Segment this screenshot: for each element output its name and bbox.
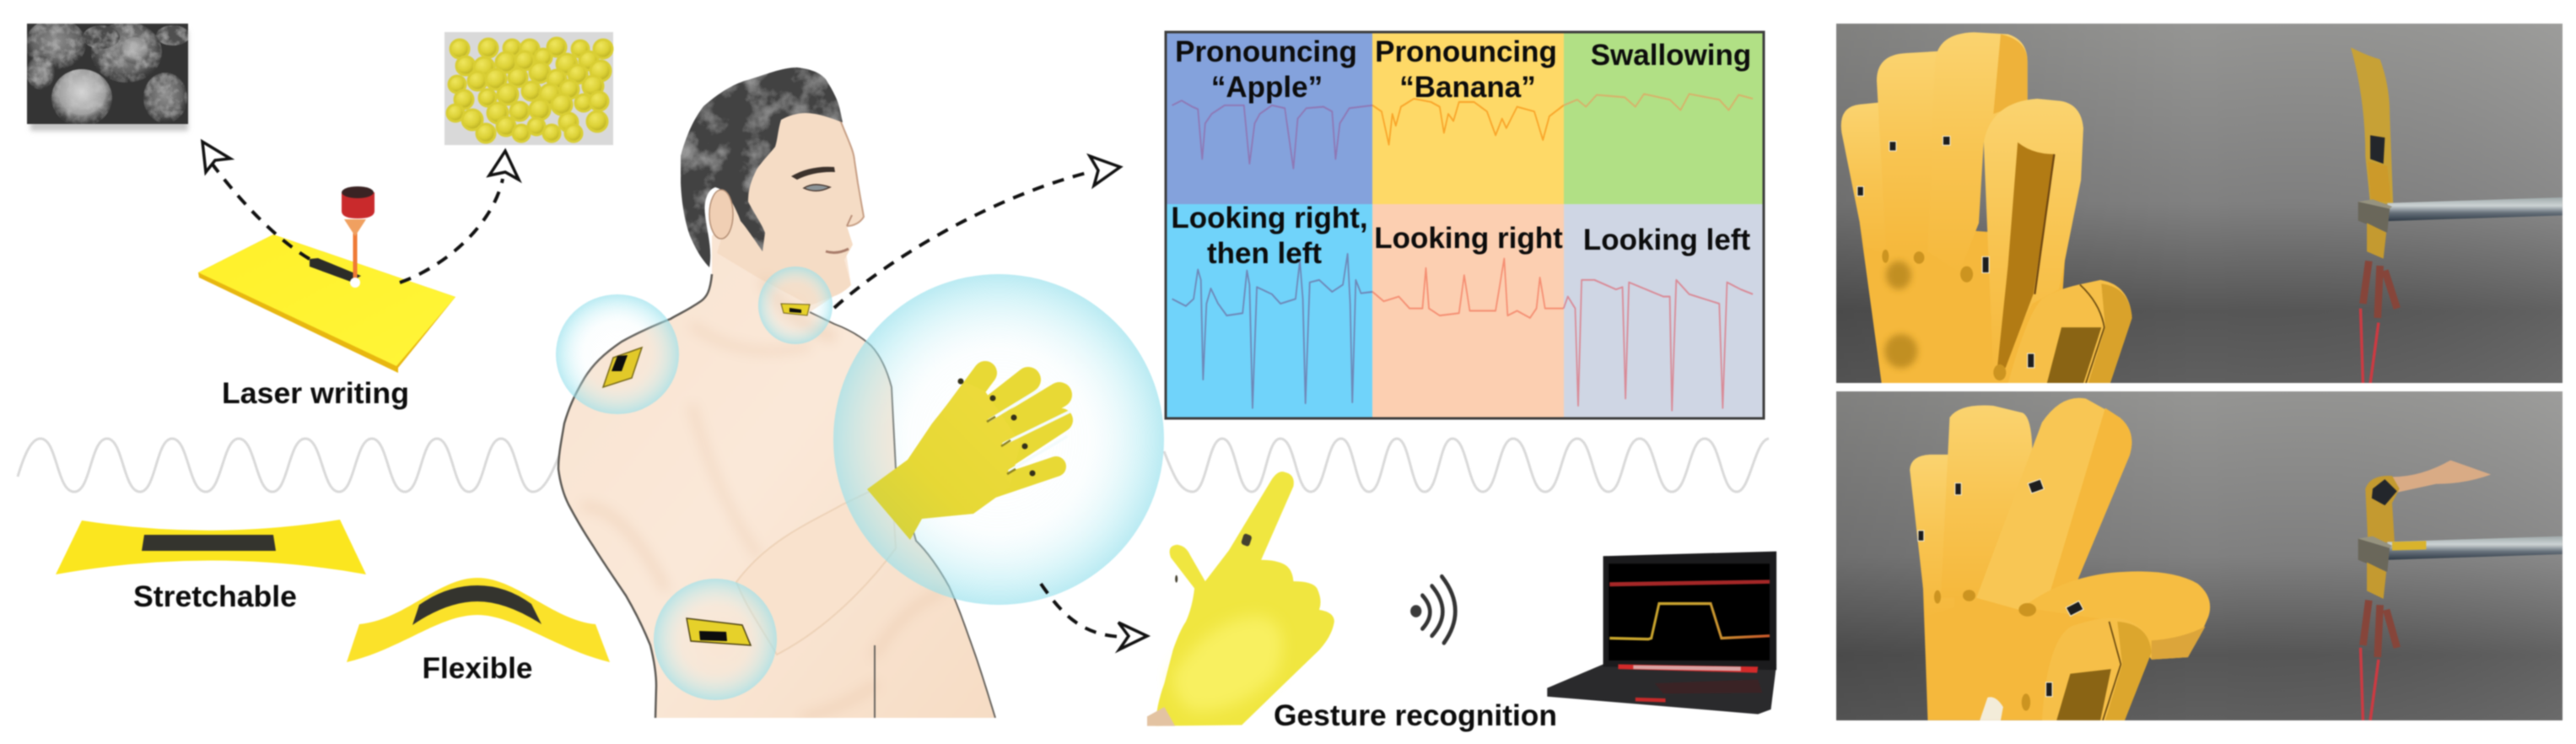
- label: Pronouncing Banana: Pronouncing: [1375, 35, 1557, 68]
- strain sensor strip: [2351, 47, 2393, 204]
- finger: pinky: [1909, 454, 1948, 587]
- sensors: [1918, 479, 2083, 697]
- cell: Looking right: [1372, 204, 1564, 418]
- wires: [2361, 648, 2379, 720]
- cell: Pronouncing Apple: [1166, 32, 1372, 204]
- brow and eye: [791, 167, 835, 180]
- bubble: neck sensor: [758, 267, 833, 344]
- sensor patch: shoulder: [603, 348, 642, 387]
- cell: Looking left: [1564, 204, 1764, 418]
- trace: Apple: [1172, 100, 1372, 169]
- wave: right background signal: [1164, 439, 1769, 492]
- leads: [2367, 223, 2386, 259]
- finger: ring: [1941, 406, 2032, 598]
- written strip: [310, 258, 361, 282]
- label: Gesture recognition: Gesture recognition: [1274, 699, 1557, 732]
- label: Pronouncing Apple: “Apple”: [1211, 71, 1323, 104]
- mouth: [826, 249, 849, 252]
- label: Looking right, then left: then left: [1207, 237, 1322, 270]
- palm: [1860, 223, 2067, 383]
- leads: [2367, 563, 2386, 599]
- label: Looking left: Looking left: [1583, 224, 1750, 256]
- finger: ring: [1877, 51, 1937, 251]
- cell: Pronouncing Banana: [1372, 32, 1564, 204]
- ear: [709, 190, 733, 239]
- signal traces: [1172, 94, 1753, 411]
- illustration: laser writing plate: [198, 186, 455, 373]
- illustration: stretchable film: [56, 520, 366, 574]
- clips: [2363, 261, 2397, 318]
- clamp and rod: [2387, 536, 2563, 560]
- finger: index: [1977, 397, 2105, 609]
- photo: bent robotic hand with bent sensor: [1836, 391, 2563, 720]
- finger: bent thumb side: [2023, 571, 2210, 660]
- trace: Looking right: [1372, 259, 1564, 318]
- wave: left background signal: [18, 439, 561, 492]
- icon: wireless signal: [1410, 576, 1455, 643]
- laser head: [342, 192, 375, 218]
- icon: yellow robotic glove with sensors: [867, 373, 1070, 540]
- icon: pointing yellow hand: [1147, 472, 1334, 726]
- face: [717, 105, 864, 305]
- bubble: hand sensor: [833, 274, 1164, 605]
- outline right: [810, 312, 995, 718]
- finger: lower thumb: [2043, 619, 2126, 720]
- illustration: flexible film: [347, 578, 610, 662]
- arrow: laser writing to particle model: [400, 151, 519, 283]
- hair: [681, 67, 843, 267]
- palm: [1922, 589, 2101, 721]
- finger: index: [1983, 98, 2084, 321]
- cell: Swallowing: [1564, 32, 1764, 204]
- arrow: neck sensor to signal table: [834, 156, 1120, 308]
- image: yellow nanoparticle box: [445, 32, 613, 145]
- trace: Swallowing: [1564, 94, 1753, 110]
- bubble: shoulder sensor: [556, 294, 679, 414]
- bubble: elbow sensor: [654, 579, 777, 700]
- label: Swallowing: Swallowing: [1591, 39, 1751, 72]
- label: Flexible: Flexible: [422, 652, 533, 685]
- clamp and rod: [2387, 197, 2563, 221]
- sensor patch: neck: [781, 304, 810, 315]
- sensor patch: elbow: [687, 618, 751, 645]
- outline left: [558, 274, 712, 718]
- yellow substrate: [198, 235, 455, 373]
- image: SEM micrograph: [25, 19, 190, 131]
- cell: Looking right then left: [1166, 204, 1372, 418]
- face profile: [840, 120, 864, 226]
- arrow: hand to gesture recognition: [1041, 584, 1147, 650]
- arrow: laser writing to SEM: [202, 142, 310, 259]
- torso: [558, 235, 995, 719]
- label: Pronouncing Apple: Pronouncing: [1175, 35, 1357, 68]
- panel: signal table: [1166, 32, 1764, 418]
- label: Looking right, then left: Looking right,: [1171, 202, 1368, 235]
- label: Laser writing: Laser writing: [222, 377, 409, 410]
- sensors: [1857, 136, 2034, 368]
- finger: thumb: [2008, 280, 2132, 383]
- finger: middle: [1930, 31, 2028, 232]
- trace: Looking left: [1564, 280, 1753, 411]
- laser beam: [353, 221, 358, 280]
- clips: [2363, 601, 2397, 657]
- trace: Banana: [1372, 99, 1564, 145]
- label: Pronouncing Banana: “Banana”: [1399, 71, 1536, 104]
- wires: [2361, 309, 2379, 383]
- icon: laptop with signal: [1547, 552, 1776, 714]
- skin shading: [582, 278, 945, 718]
- palm shading: [1886, 261, 1911, 289]
- white stick: [1980, 697, 2003, 720]
- photo: open robotic hand with straight sensor: [1836, 24, 2563, 383]
- table border: [1166, 32, 1764, 418]
- bent sensor strip: [2392, 461, 2491, 493]
- label: Looking right: Looking right: [1374, 222, 1563, 255]
- forearm: [736, 481, 896, 655]
- finger: pinky: [1840, 101, 1886, 226]
- illustration: human torso and head: [558, 67, 995, 718]
- label: Stretchable: Stretchable: [133, 580, 297, 613]
- trace: Looking right then left: [1172, 254, 1372, 408]
